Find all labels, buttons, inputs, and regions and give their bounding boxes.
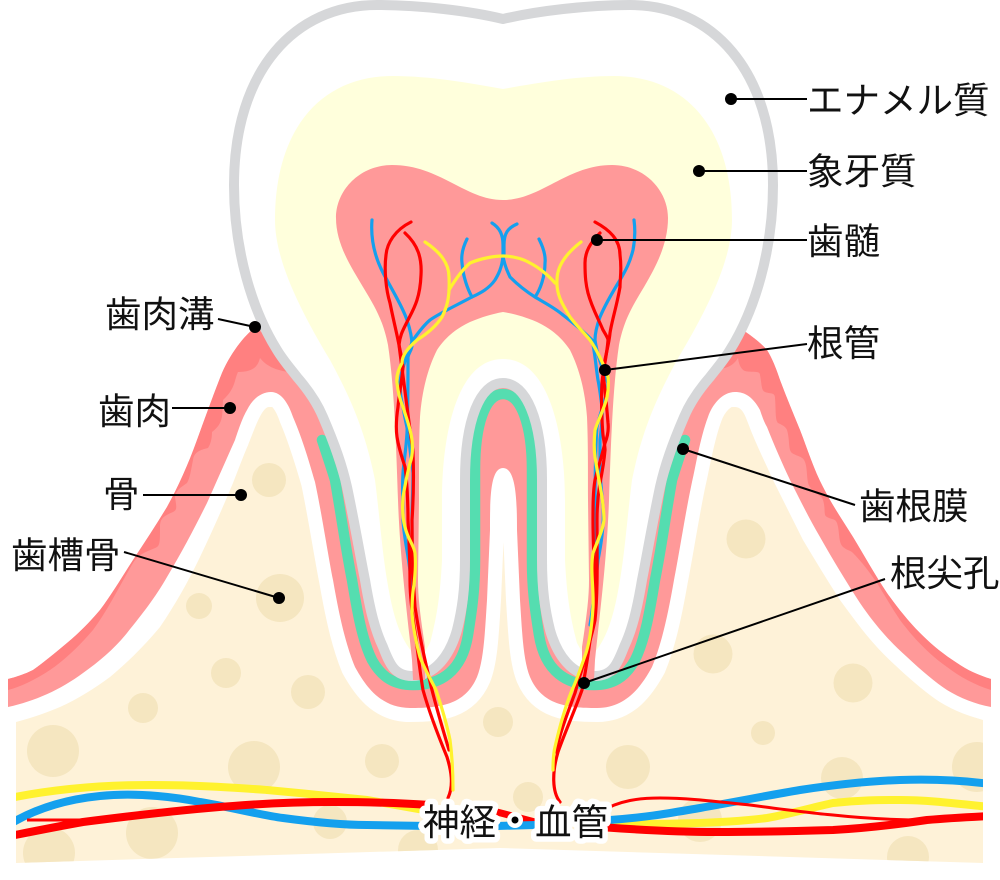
callout: 歯肉: 歯肉	[98, 391, 171, 432]
callout: 歯肉	[98, 391, 236, 432]
label: 神経: 神経	[423, 802, 496, 843]
periodontal ligament	[322, 394, 685, 685]
pulp	[336, 165, 668, 680]
callout: 歯槽骨: 歯槽骨	[11, 535, 120, 576]
callout: 歯髄: 歯髄	[807, 221, 880, 262]
callout: 歯肉溝: 歯肉溝	[105, 294, 214, 335]
panel: bone	[16, 407, 1000, 879]
dentin	[275, 76, 732, 652]
callout: 歯根膜: 歯根膜	[859, 486, 968, 527]
callout: エナメル質	[725, 80, 990, 121]
callout: 象牙質: 象牙質	[807, 151, 916, 192]
callout: 骨: 骨	[103, 474, 140, 515]
pulp vessels	[372, 220, 635, 802]
callout: 根尖孔: 根尖孔	[890, 553, 1000, 594]
gum margin right	[700, 330, 991, 690]
tooth enamel	[234, 5, 773, 676]
gum margin left	[8, 328, 300, 690]
callout: 歯槽骨	[11, 535, 285, 604]
callout: 歯髄	[591, 221, 880, 262]
callout: 象牙質	[693, 151, 916, 192]
callout: 根管	[599, 323, 880, 376]
panel: gum	[8, 328, 991, 708]
callout: 歯根膜	[677, 443, 968, 527]
callout: エナメル質: エナメル質	[807, 80, 990, 121]
callout: 根管: 根管	[807, 323, 880, 364]
callout: 根尖孔	[578, 553, 1000, 689]
thick vessels and nerves	[10, 780, 990, 836]
callout: 骨	[103, 474, 247, 515]
label: 血管: 血管	[535, 802, 608, 843]
center dot	[507, 812, 523, 828]
